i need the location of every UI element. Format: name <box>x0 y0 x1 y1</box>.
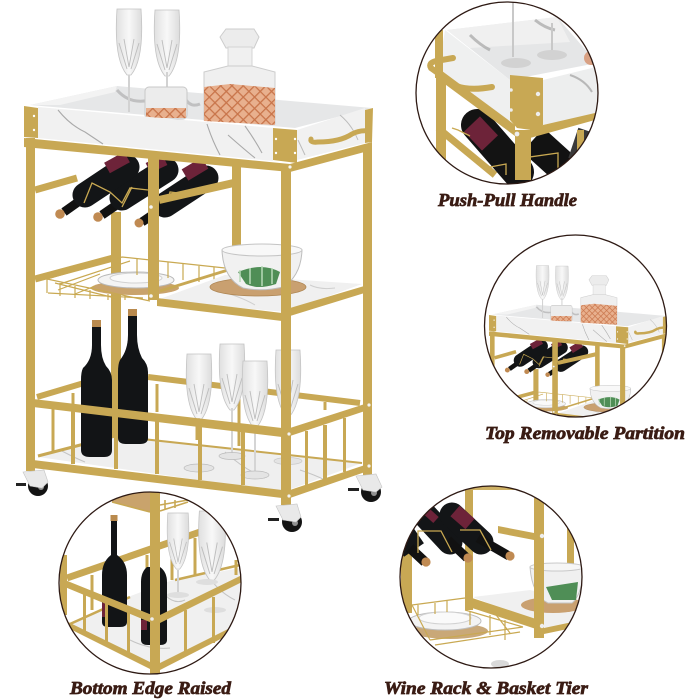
inset: top removable partition close-up <box>484 234 668 418</box>
wire basket with plate <box>409 598 523 645</box>
caption: bottom edge raised: Bottom Edge Raised <box>69 678 231 698</box>
marble tray faces <box>438 30 600 125</box>
inset: bottom edge raised close-up <box>59 490 242 680</box>
flutes <box>167 511 226 613</box>
caption: top removable partition: Top Removable Partition <box>485 423 685 443</box>
rear rail and balusters <box>60 532 240 624</box>
caption: wine rack and basket tier: Wine Rack & Basket Tier <box>384 678 588 698</box>
caption: push-pull handle: Push-Pull Handle <box>437 190 577 210</box>
bottles <box>102 515 167 645</box>
shelf, mat and bowl <box>473 563 585 628</box>
tray interior <box>447 0 598 80</box>
glass base at lower edge <box>491 660 509 668</box>
inset: wine rack and basket tier close-up <box>380 486 585 668</box>
inset: push-pull handle close-up <box>416 0 600 184</box>
gold frame and bottles <box>430 30 595 180</box>
marble shelf <box>70 568 240 670</box>
front rails, balusters and leg <box>60 490 242 680</box>
main bar cart photo <box>16 9 382 532</box>
bottles on rack <box>403 502 515 567</box>
front frame <box>473 498 569 638</box>
upper basket remnant <box>112 492 188 512</box>
rear frame <box>401 486 574 613</box>
